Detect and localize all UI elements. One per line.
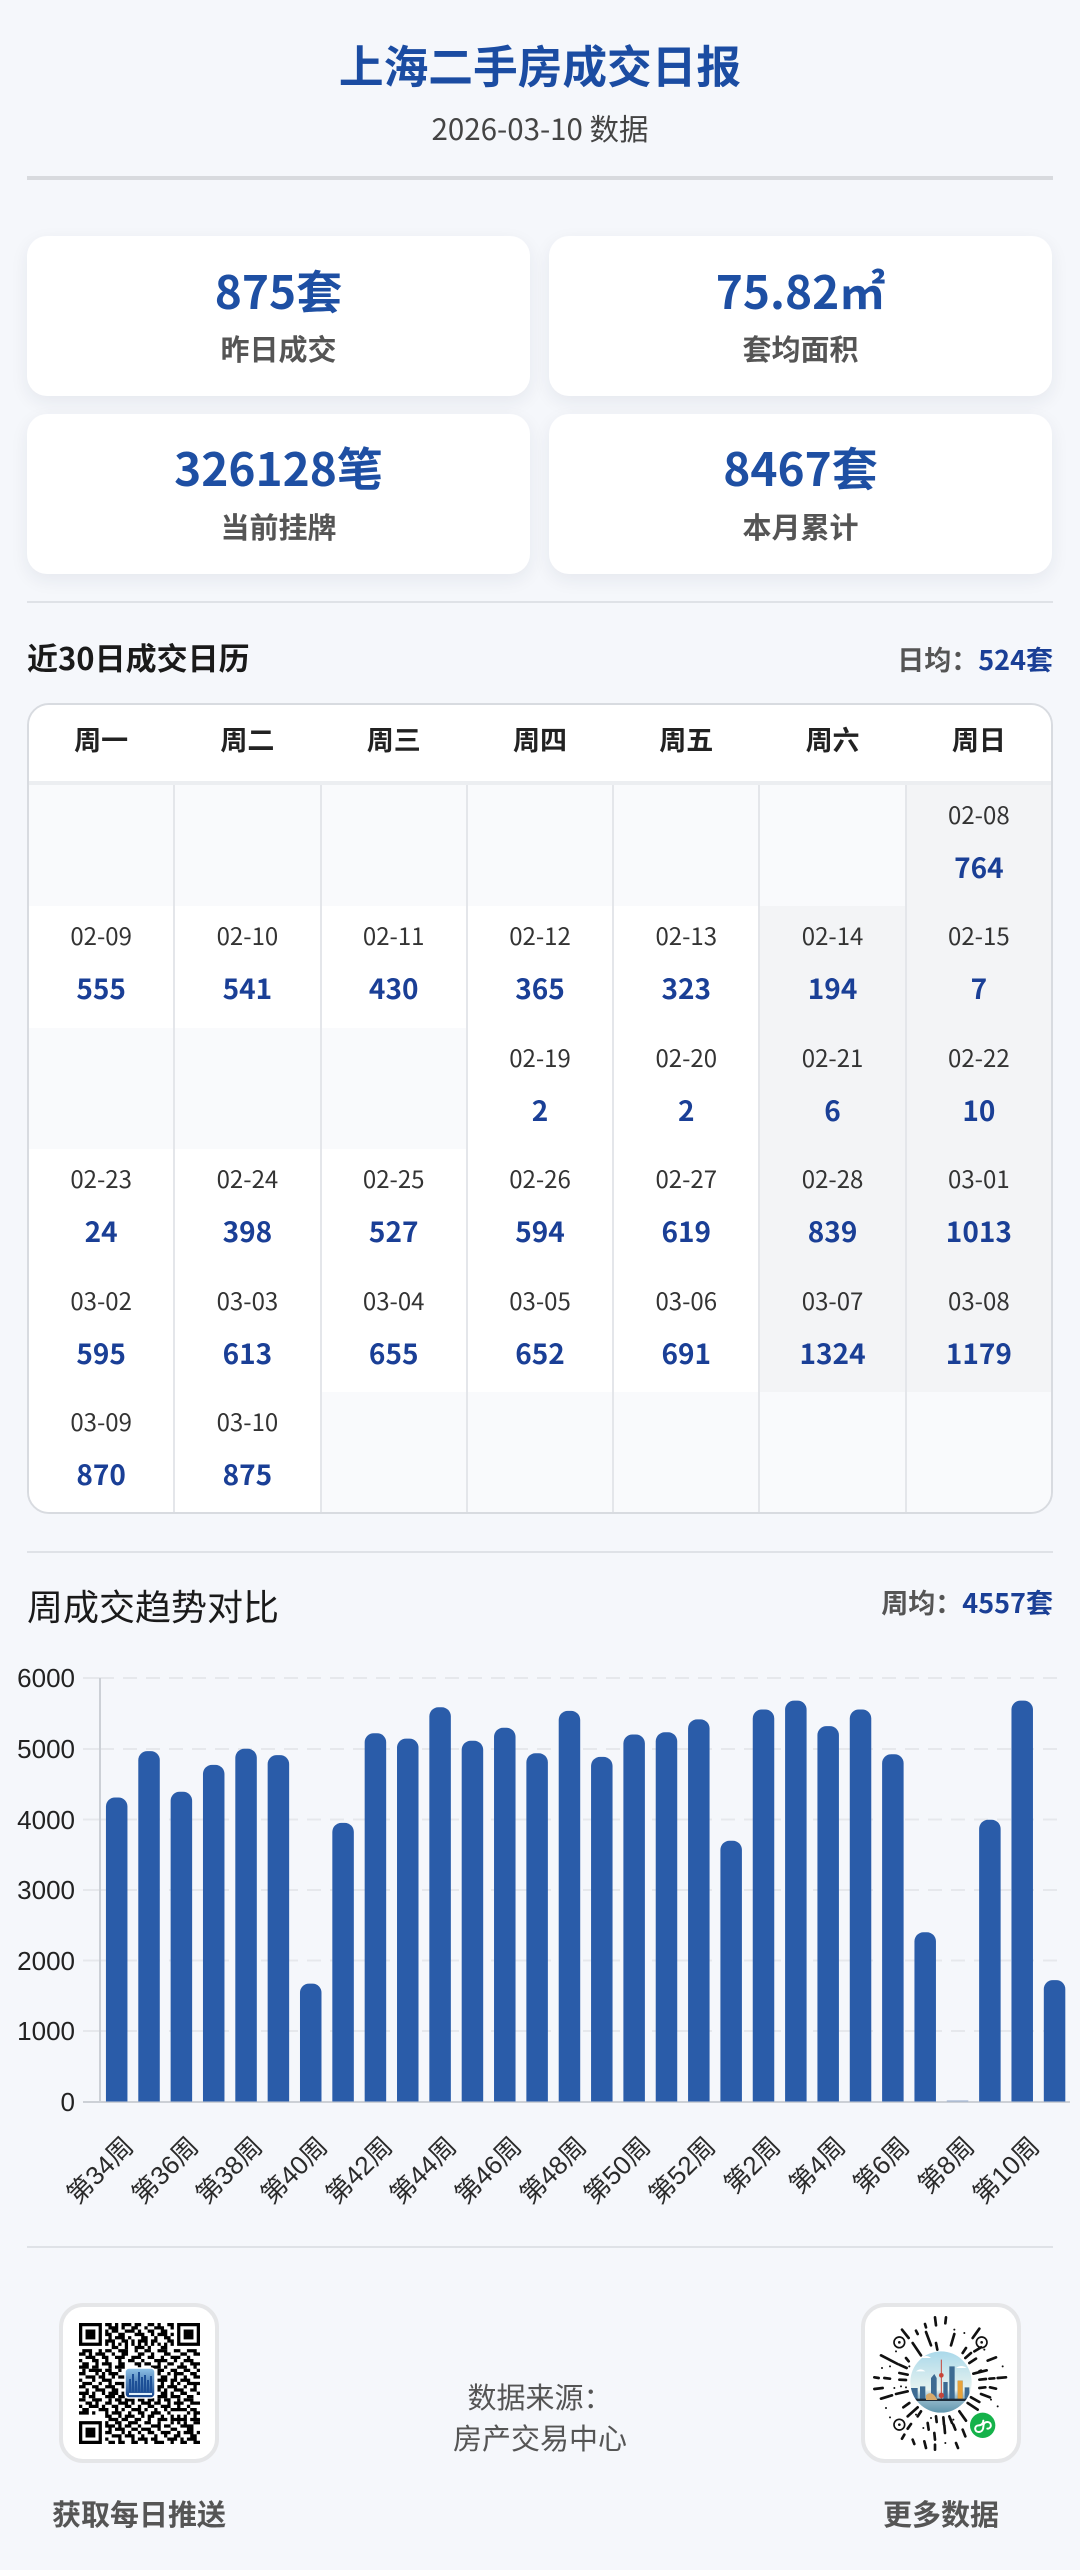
- calendar day grid: 1324: [800, 1333, 866, 1373]
- calendar day grid: 02-21: [802, 1039, 863, 1074]
- stat card: current listings: 当前挂牌: [220, 505, 336, 547]
- x axis week labels: 第52周: [643, 2131, 721, 2209]
- calendar day grid: 02-27: [655, 1160, 717, 1195]
- stat card: yesterday deals: 昨日成交: [220, 327, 336, 369]
- x axis week labels: 第6周: [847, 2131, 915, 2199]
- calendar day grid: 02-25: [363, 1160, 424, 1195]
- x axis week labels: 第50周: [578, 2131, 656, 2209]
- stat card: yesterday deals: 875套: [215, 257, 342, 323]
- code finder rings: [894, 2337, 987, 2430]
- calendar day grid: 527: [369, 1211, 418, 1251]
- stat card: month total: [549, 414, 1052, 574]
- calendar day grid: 1179: [946, 1333, 1012, 1373]
- stat card: average area: 套均面积: [742, 327, 858, 369]
- stat card: yesterday deals: [27, 236, 530, 396]
- weekday header: 周日: [952, 719, 1006, 758]
- stat card: average area: [549, 236, 1052, 396]
- y axis labels: 2000: [17, 1946, 75, 1976]
- data source note: 房产交易中心: [453, 2416, 627, 2458]
- QR code card: daily push: [59, 2303, 219, 2463]
- x axis week labels: 第10周: [967, 2131, 1045, 2209]
- data source note: 数据来源：: [467, 2375, 612, 2417]
- calendar day grid: 430: [369, 968, 418, 1008]
- x axis week labels: 第48周: [514, 2131, 592, 2209]
- calendar day grid: 02-13: [655, 917, 717, 952]
- y axis labels: 3000: [17, 1875, 75, 1905]
- QR code: [79, 2323, 200, 2444]
- mini-program code: [873, 2316, 1008, 2451]
- trend chart heading: 周成交趋势对比: [27, 1579, 279, 1631]
- calendar day grid: 03-02: [70, 1282, 132, 1317]
- calendar day grid: 594: [515, 1211, 565, 1251]
- calendar day grid: 6: [824, 1090, 841, 1130]
- weekday header: 周六: [806, 719, 860, 758]
- calendar day grid: 619: [662, 1211, 711, 1251]
- calendar day grid: 03-05: [509, 1282, 571, 1317]
- calendar day grid: 03-08: [948, 1282, 1010, 1317]
- calendar day grid: 839: [808, 1211, 857, 1251]
- weekday header: 周一: [74, 719, 128, 758]
- bars: [106, 1701, 1065, 2124]
- calendar day grid: 02-11: [363, 917, 424, 952]
- weekday header: [28, 705, 1052, 785]
- calendar day grid: 03-01: [948, 1160, 1010, 1195]
- x axis week labels: 第44周: [384, 2131, 462, 2209]
- panel: calendar table: [27, 703, 1053, 1514]
- calendar day grid: 194: [808, 968, 857, 1008]
- y axis labels: 4000: [17, 1805, 75, 1835]
- mini-program badge: [970, 2413, 995, 2438]
- calendar day grid: 764: [954, 847, 1004, 887]
- calendar day grid: 652: [515, 1333, 565, 1373]
- calendar heading: 近30日成交日历: [27, 634, 250, 679]
- calendar daily average: 日均：524套: [897, 639, 1053, 678]
- calendar day grid: 02-09: [70, 917, 132, 952]
- calendar day grid: 2: [532, 1090, 548, 1130]
- calendar day grid: 555: [76, 968, 126, 1008]
- report date: 2026-03-10 数据: [431, 107, 649, 149]
- calendar day grid: 870: [76, 1454, 126, 1494]
- x axis week labels: [61, 2131, 1045, 2209]
- x axis week labels: 第38周: [190, 2131, 268, 2209]
- Shanghai skyline illustration: [909, 2351, 973, 2414]
- calendar day grid: 02-19: [509, 1039, 571, 1074]
- calendar day grid: 613: [223, 1333, 272, 1373]
- calendar day grid: 323: [662, 968, 711, 1008]
- y axis labels: 5000: [17, 1734, 75, 1764]
- calendar day grid: 03-03: [217, 1282, 278, 1317]
- QR center logo: [124, 2367, 154, 2399]
- x axis week labels: 第34周: [61, 2131, 139, 2209]
- stat card: month total: 8467套: [723, 434, 878, 500]
- calendar day grid: 02-28: [802, 1160, 863, 1195]
- calendar day grid: 02-23: [70, 1160, 132, 1195]
- calendar day grid: 03-04: [363, 1282, 424, 1317]
- stat card: current listings: 326128笔: [174, 434, 383, 500]
- y axis labels: 6000: [17, 1663, 75, 1693]
- x axis week labels: 第8周: [912, 2131, 980, 2199]
- calendar day grid: 03-07: [802, 1282, 863, 1317]
- stat card: average area: 75.82㎡: [716, 257, 885, 323]
- calendar day grid: [29, 785, 1012, 1512]
- weekday header: 周三: [367, 719, 421, 758]
- data source note: [453, 2375, 627, 2458]
- x axis week labels: 第40周: [255, 2131, 333, 2209]
- calendar day grid: 02-24: [217, 1160, 278, 1195]
- QR label: 获取每日推送: [52, 2492, 226, 2534]
- calendar day grid: 1013: [946, 1211, 1012, 1251]
- calendar day grid: 655: [369, 1333, 418, 1373]
- calendar day grid: 2: [678, 1090, 695, 1130]
- x axis week labels: 第46周: [449, 2131, 527, 2209]
- calendar day grid: 02-22: [948, 1039, 1010, 1074]
- calendar day grid: 691: [662, 1333, 711, 1373]
- y axis labels: 1000: [17, 2016, 75, 2046]
- stat card: current listings: [27, 414, 530, 574]
- weekday header: 周五: [659, 719, 713, 758]
- calendar day grid: 02-15: [948, 917, 1010, 952]
- calendar day grid: 10: [962, 1090, 995, 1130]
- title: 上海二手房成交日报: [339, 31, 741, 96]
- calendar day grid: 02-20: [655, 1039, 717, 1074]
- calendar day grid: 595: [76, 1333, 126, 1373]
- calendar day grid: 365: [515, 968, 565, 1008]
- calendar day grid: 02-08: [948, 796, 1010, 831]
- x axis week labels: 第42周: [320, 2131, 398, 2209]
- stat card: month total: 本月累计: [742, 505, 858, 547]
- y axis labels: 0: [61, 2087, 75, 2117]
- x axis week labels: 第36周: [126, 2131, 204, 2209]
- bar chart: weekly deals: [17, 1663, 1070, 2209]
- weekday header: 周二: [220, 719, 274, 758]
- trend weekly average: 周均：4557套: [881, 1582, 1053, 1621]
- calendar day grid: 02-14: [802, 917, 863, 952]
- mini-program label: 更多数据: [883, 2492, 999, 2534]
- weekday header: 周四: [513, 719, 567, 758]
- calendar day grid: 541: [223, 968, 272, 1008]
- calendar day grid: 02-10: [217, 917, 278, 952]
- calendar day grid: 7: [971, 968, 987, 1008]
- calendar day grid: 875: [223, 1454, 272, 1494]
- x axis week labels: 第2周: [718, 2131, 786, 2199]
- calendar day grid: 24: [85, 1211, 118, 1251]
- calendar day grid: 03-06: [655, 1282, 717, 1317]
- x axis week labels: 第4周: [783, 2131, 851, 2199]
- y axis labels: [17, 1663, 75, 2117]
- mini-program code card: [861, 2303, 1021, 2463]
- calendar day grid: 02-12: [509, 917, 571, 952]
- calendar day grid: 03-10: [217, 1403, 278, 1438]
- calendar day grid: 398: [223, 1211, 272, 1251]
- calendar day grid: 03-09: [70, 1403, 132, 1438]
- calendar day grid: 02-26: [509, 1160, 571, 1195]
